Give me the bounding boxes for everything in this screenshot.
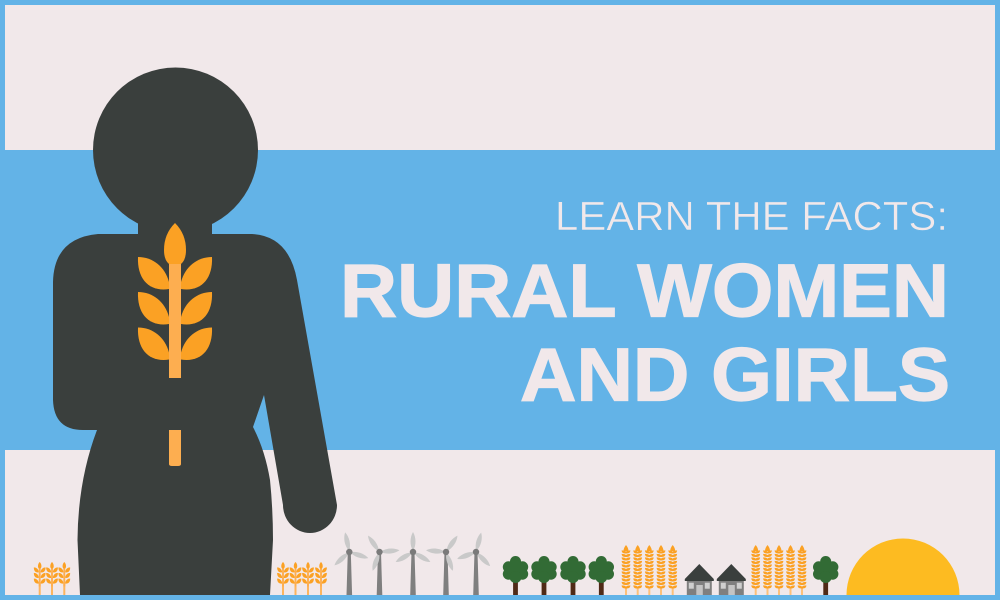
- heading: learn the facts: LEARN THE FACTS:: [555, 193, 948, 239]
- body: [53, 215, 337, 595]
- houses: [685, 564, 746, 595]
- turbine 5: [456, 532, 492, 595]
- heading: and girls: AND GIRLS: [520, 332, 950, 416]
- single tree: [813, 556, 838, 595]
- trees group: [503, 556, 614, 595]
- wind turbines: [333, 532, 492, 595]
- small wheat group left: [34, 562, 70, 595]
- turbine 4: [426, 534, 460, 595]
- blue band: [0, 150, 1000, 450]
- sun: [846, 538, 960, 595]
- head: [93, 68, 258, 232]
- turbine 2: [366, 534, 400, 595]
- small wheat group right: [277, 562, 327, 595]
- tall wheat group left: [622, 545, 677, 595]
- turbine 3: [394, 532, 432, 595]
- tall wheat group right: [751, 545, 806, 595]
- silhouette of woman with wheat: [53, 68, 337, 595]
- turbine 1: [333, 532, 369, 595]
- icon: wheat on back: [138, 223, 212, 378]
- heading: rural women: RURAL WOMEN: [340, 248, 949, 332]
- title text: [340, 193, 950, 416]
- lower wheat stalk: [169, 430, 181, 466]
